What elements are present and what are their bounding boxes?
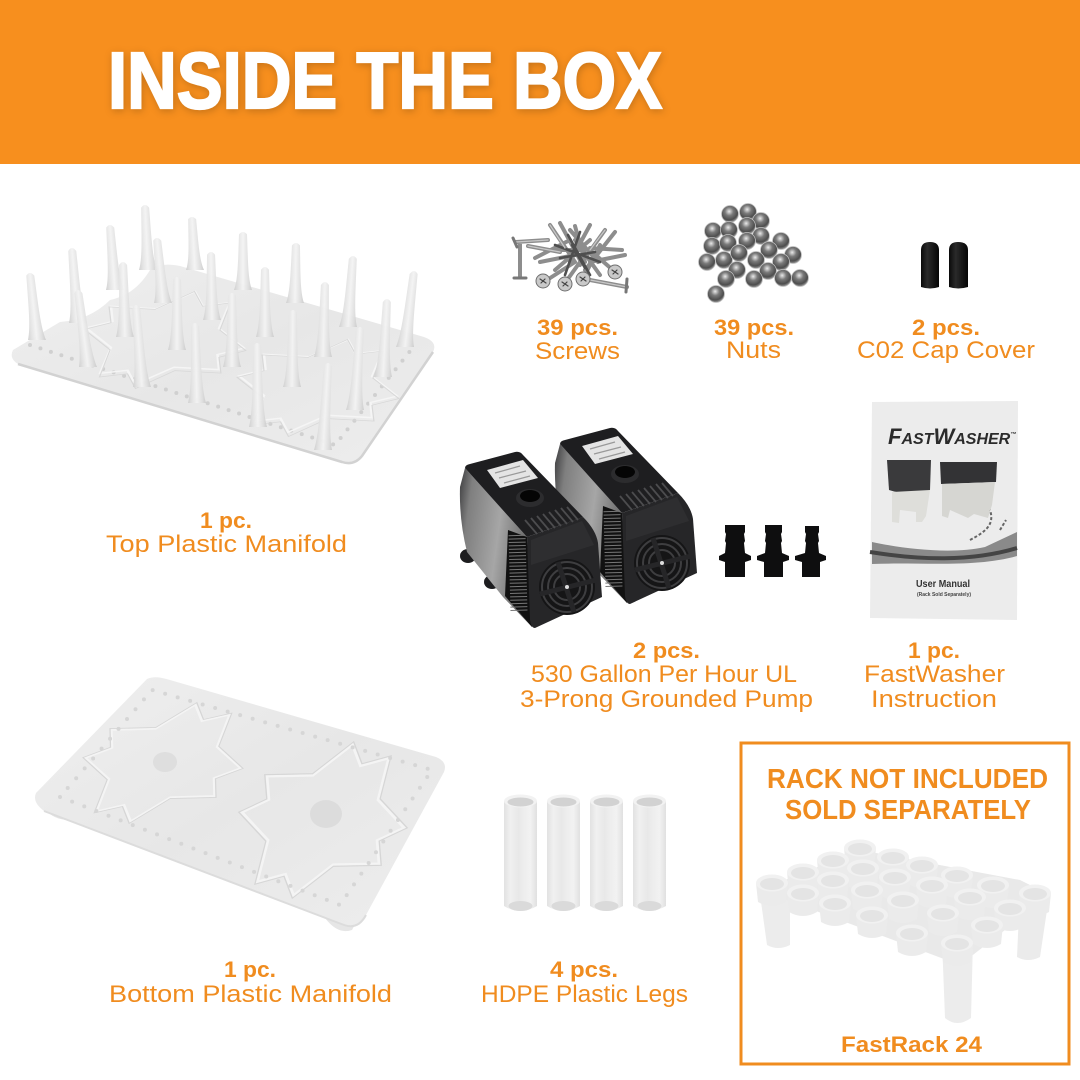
panel: bottom plastic manifold [35, 677, 445, 1008]
image: four clear legs [504, 794, 666, 911]
label: legs [481, 957, 688, 1008]
image: two black caps [921, 242, 968, 288]
panel: top plastic manifold [12, 205, 434, 558]
label: top manifold: 1 pc. [200, 508, 252, 533]
label: bottom manifold: 1 pc. [224, 957, 276, 982]
label: manual: FastWasher [864, 661, 1005, 688]
label: legs: HDPE Plastic Legs [481, 981, 688, 1008]
label: top manifold: Top Plastic Manifold [106, 531, 347, 558]
label: legs: 4 pcs. [550, 957, 618, 982]
image: nuts pile [698, 204, 808, 302]
image: hose fittings [719, 525, 826, 577]
label: screws: 39 pcs. [537, 315, 618, 340]
image: screws pile [513, 223, 627, 292]
image: back pump [555, 428, 697, 604]
panel: screws [513, 223, 627, 365]
label: nuts [714, 315, 794, 364]
callout border [741, 743, 1069, 1064]
panel: CO2 cap cover [857, 242, 1035, 364]
panel: pumps [460, 428, 826, 713]
label: manual: Instruction [871, 686, 997, 713]
label: manual [864, 638, 1005, 713]
manual logo: FASTWASHER [888, 424, 1010, 449]
rack name: FastRack 24 [841, 1032, 983, 1057]
label: bottom manifold: Bottom Plastic Manifold [109, 981, 392, 1008]
manual logo: ™ [1010, 431, 1016, 438]
label: bottom manifold [109, 957, 392, 1008]
label: screws [535, 315, 620, 365]
label: nuts: 39 pcs. [714, 315, 794, 340]
label: cap cover: C02 Cap Cover [857, 337, 1035, 364]
panel: nuts [698, 204, 808, 364]
panel: instruction manual [864, 401, 1018, 713]
label: nuts: Nuts [726, 337, 781, 364]
label: top manifold [106, 508, 347, 558]
panel: HDPE legs [481, 794, 688, 1008]
image: bottom manifold [35, 677, 445, 931]
label: pump: 2 pcs. [633, 638, 700, 663]
image: manual cover [870, 401, 1018, 620]
callout heading: SOLD SEPARATELY [785, 794, 1031, 825]
label: screws: Screws [535, 338, 620, 365]
image: front pump [460, 452, 602, 628]
label: manual: 1 pc. [908, 638, 960, 663]
callout heading: RACK NOT INCLUDED [767, 763, 1048, 794]
title: INSIDE THE BOX [108, 36, 662, 125]
label: pump: 530 Gallon Per Hour UL [531, 661, 797, 688]
manual title: User Manual [916, 578, 970, 590]
label: pump [520, 638, 813, 713]
panel: rack not included callout [741, 743, 1069, 1064]
callout heading [767, 763, 1048, 825]
manual subtitle: (Rack Sold Separately) [917, 592, 971, 598]
header banner [0, 0, 1080, 164]
label: cap cover [857, 315, 1035, 364]
label: cap cover: 2 pcs. [912, 315, 980, 340]
label: pump: 3-Prong Grounded Pump [520, 686, 813, 713]
image: FastRack 24 [756, 840, 1051, 1023]
image: top manifold with spikes [12, 205, 434, 463]
